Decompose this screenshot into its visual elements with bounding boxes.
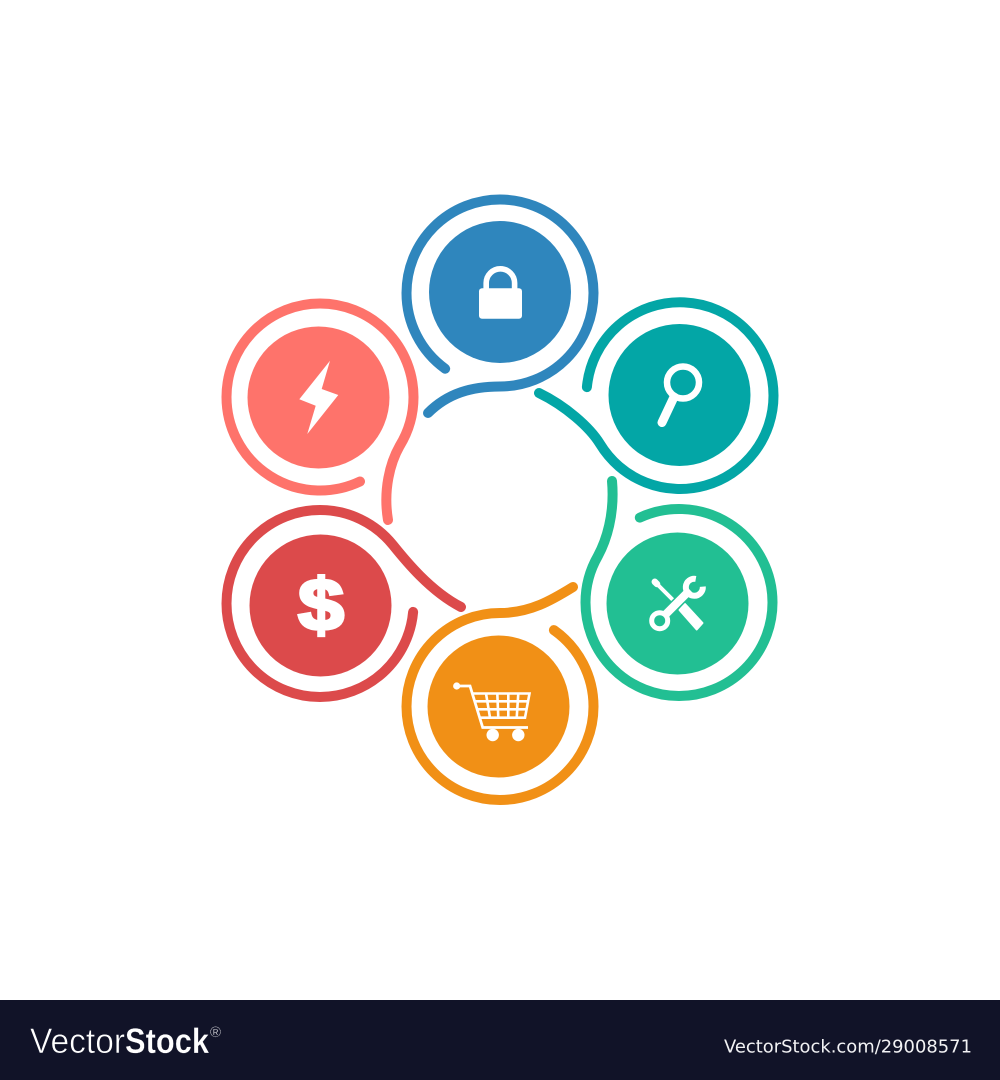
ring: orange xyxy=(406,587,594,800)
ring: coral xyxy=(226,304,414,520)
footer registered mark: ® xyxy=(210,1024,221,1041)
disc: coral xyxy=(248,326,390,468)
disc: green xyxy=(606,532,748,674)
icon: wrench and screwdriver xyxy=(652,579,703,630)
ring: blue xyxy=(406,200,594,413)
step: lock (blue) xyxy=(406,200,594,413)
icon: lightning bolt xyxy=(299,361,338,434)
disc: teal xyxy=(608,324,750,466)
ring: red xyxy=(226,510,461,697)
ring: teal xyxy=(539,302,774,489)
step: magnifier (teal) xyxy=(539,302,774,489)
footer bar xyxy=(0,1000,1000,1080)
icon: shopping cart xyxy=(453,682,530,741)
footer logo: VectorStock: VectorStock xyxy=(30,1022,209,1061)
icon: magnifying glass xyxy=(662,366,699,422)
step: dollar (red) xyxy=(226,510,461,697)
disc: blue xyxy=(429,221,571,363)
icon: padlock xyxy=(479,269,522,319)
step: shopping cart (orange) xyxy=(406,587,594,800)
step: tools (green) xyxy=(586,481,773,696)
step: lightning (coral) xyxy=(226,304,414,520)
footer id text: VectorStock.com/29008571 xyxy=(724,1036,972,1058)
disc: red xyxy=(250,534,392,676)
icon: dollar sign: $ xyxy=(298,563,344,646)
ring: green xyxy=(586,481,773,696)
disc: orange xyxy=(428,636,570,778)
